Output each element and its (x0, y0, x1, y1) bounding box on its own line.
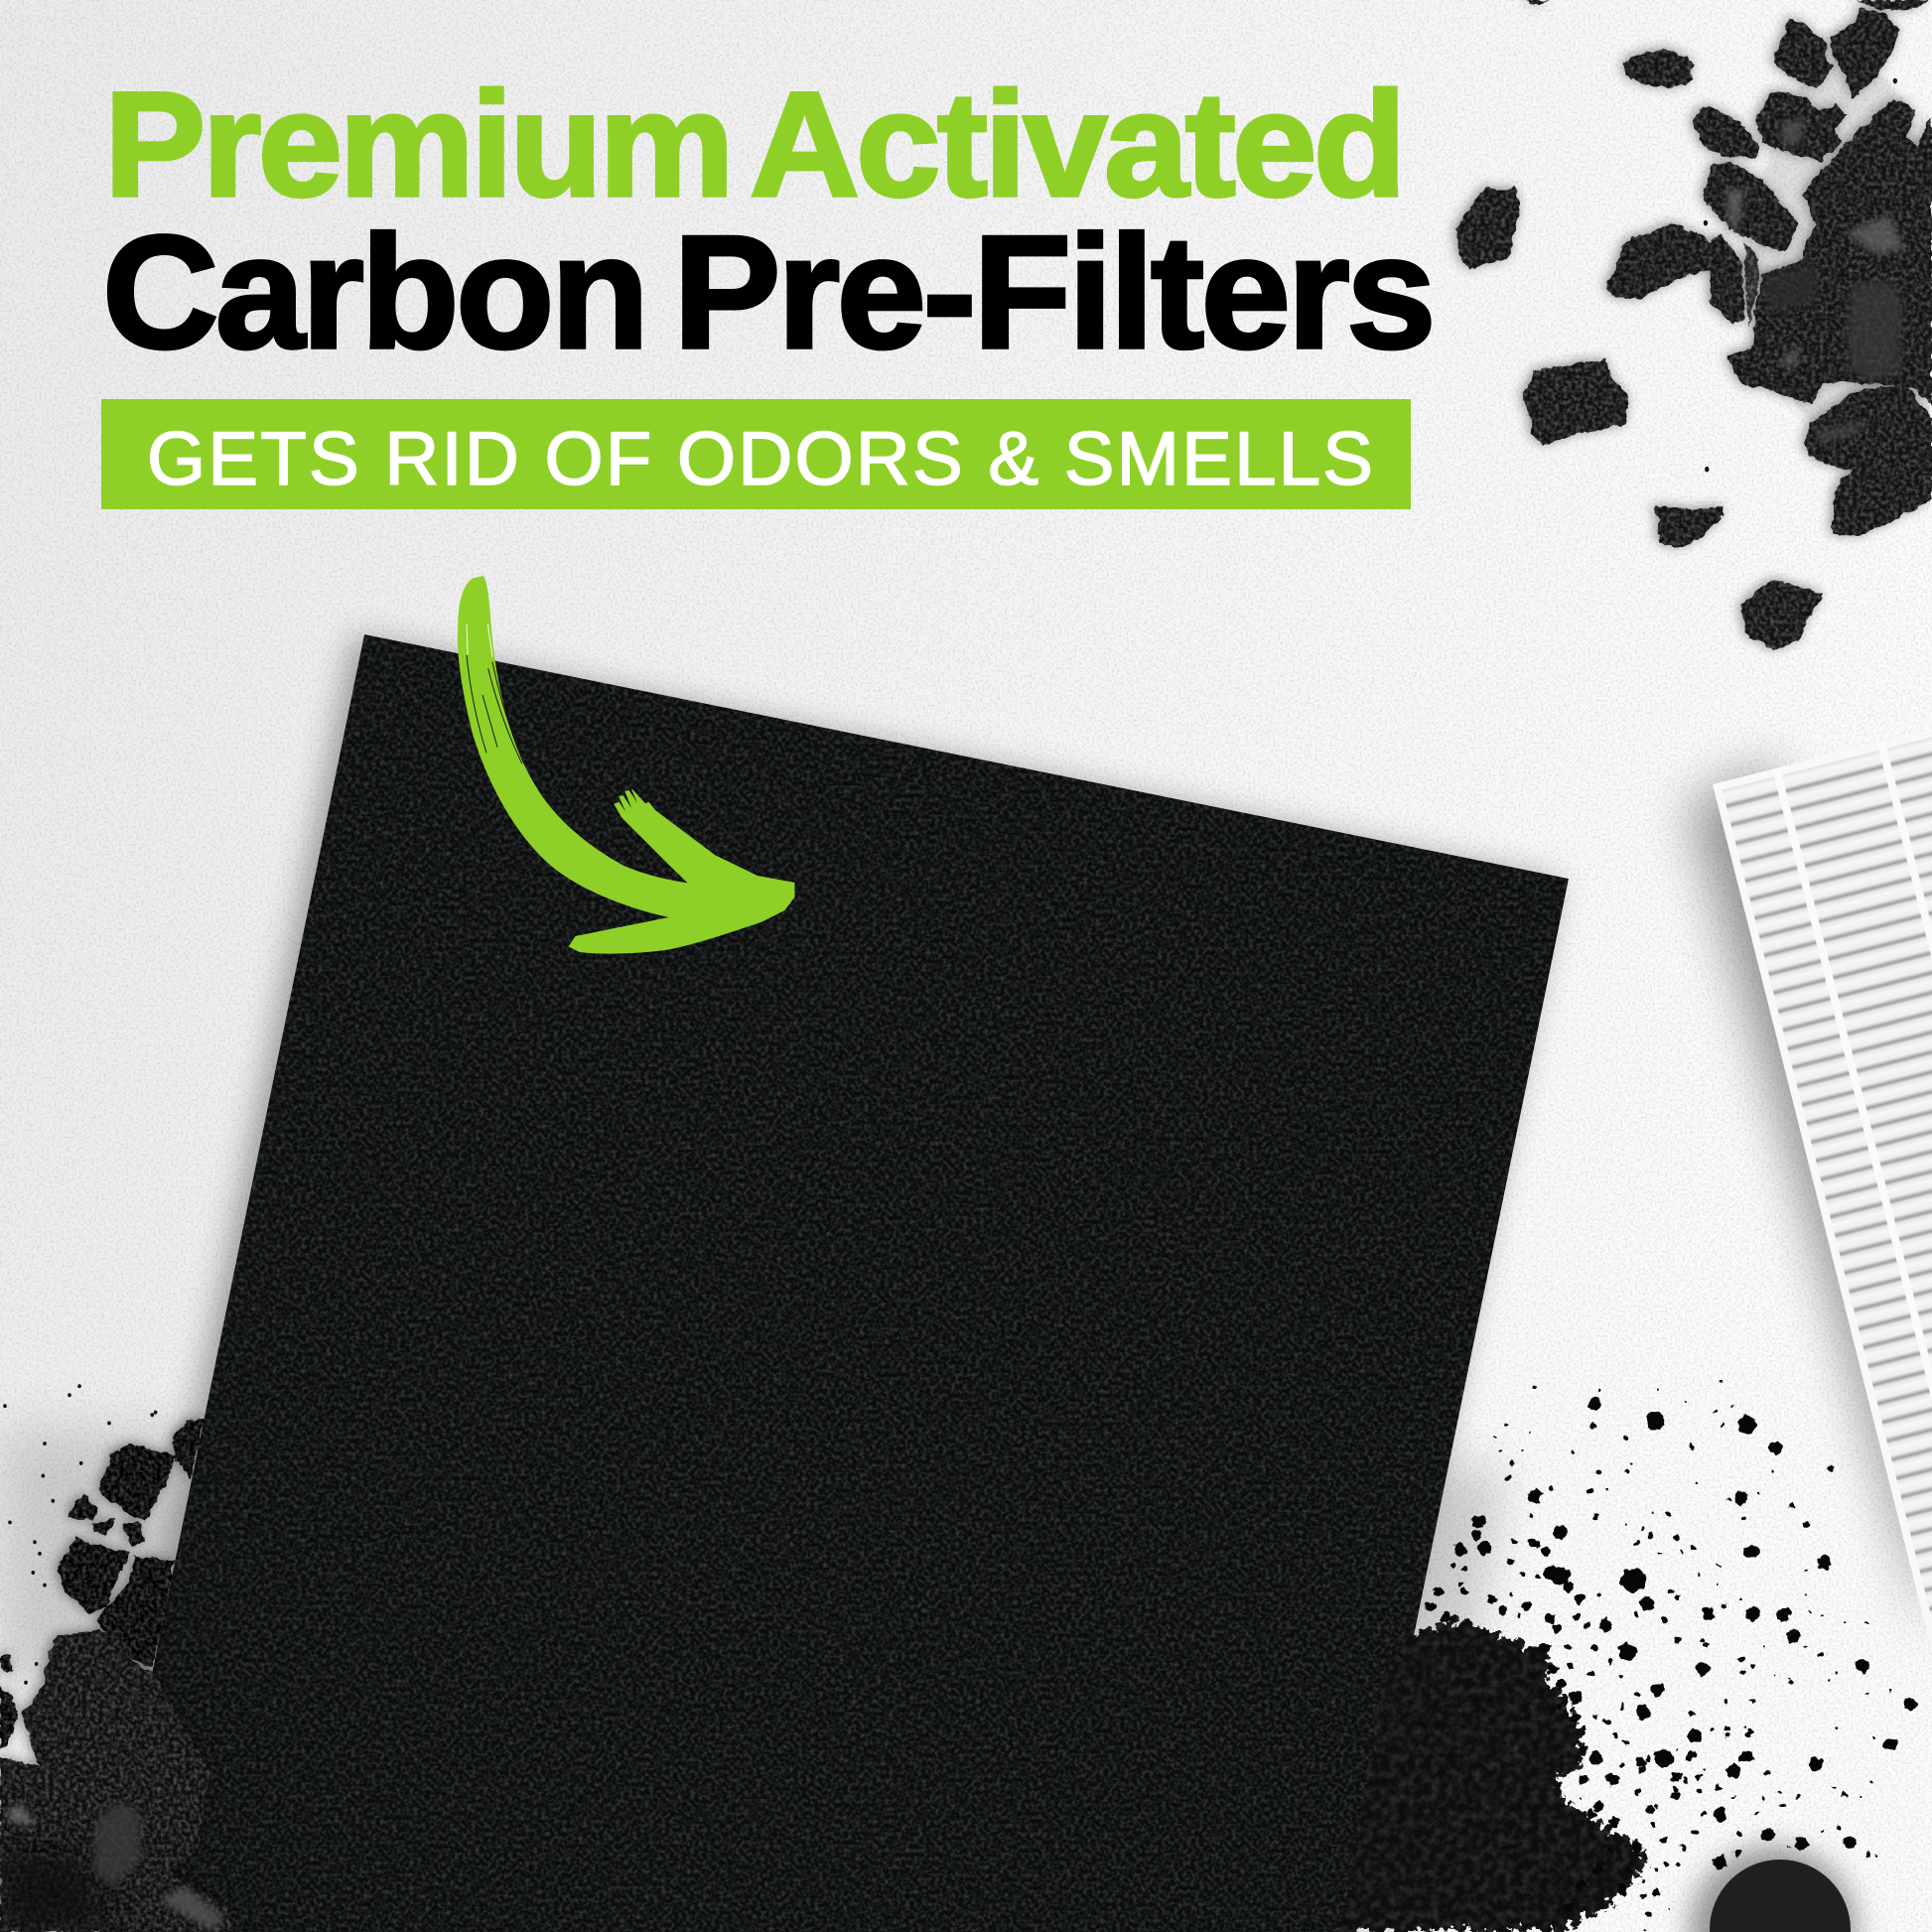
icon: green brush arrow (458, 577, 794, 953)
green subtitle banner: GETS RID OF ODORS & SMELLS (147, 417, 1373, 501)
white HEPA filter panel (1690, 687, 1932, 1843)
charcoal facet highlights top right (1726, 116, 1904, 444)
tiny charcoal specks top right (1706, 81, 1895, 470)
shadow beneath lower right powder (1360, 1469, 1499, 1932)
powder mound and scattered carbon dust lower right (1338, 1382, 1910, 1932)
shadow beneath lower left chunks (0, 1430, 199, 1688)
charcoal chunks lower left (0, 1386, 231, 1932)
charcoal pieces top right (1454, 0, 1932, 650)
black activated carbon foam sheet (99, 634, 1569, 1932)
round carbon pellet bottom right (1690, 1847, 1857, 1932)
title line one: Premium Activated (104, 61, 1403, 227)
title line two: Carbon Pre-Filters (102, 203, 1433, 382)
